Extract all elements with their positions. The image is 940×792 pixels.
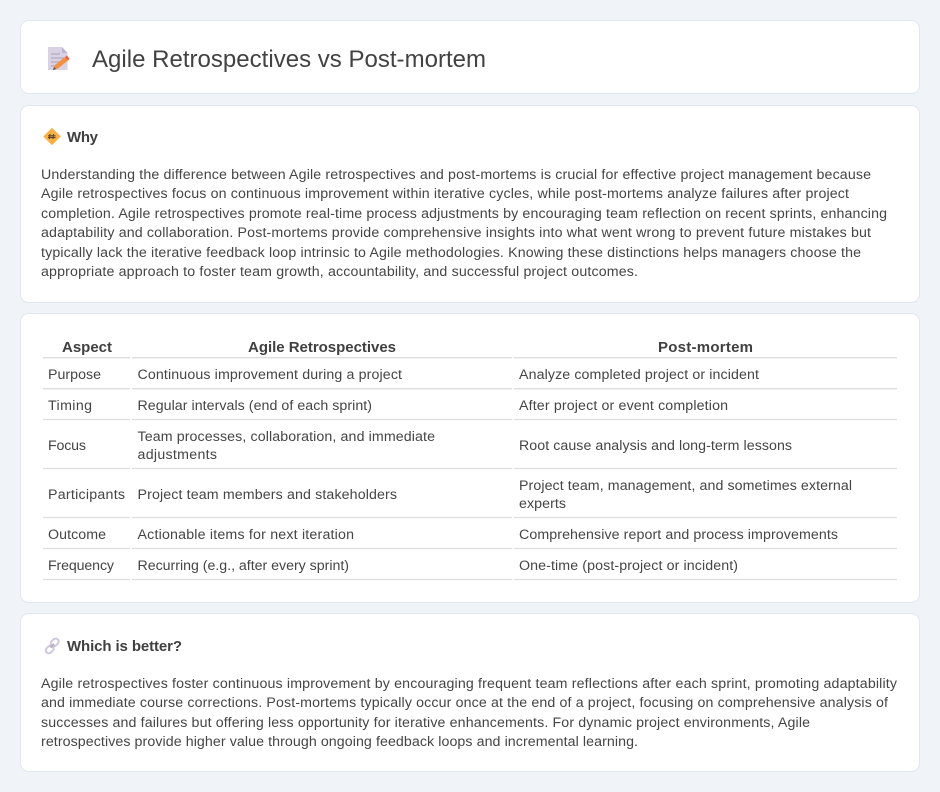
table row: purpose: Continuous improvement during a project [138,367,402,383]
table row: outcome [48,527,838,543]
table row: purpose: Purpose [48,367,101,383]
table row: participants: Project team members and stakeholders [138,487,397,503]
heading: which is better: Which is better? [67,638,182,655]
panel: comparison table [20,314,920,602]
icon: warning diamond [44,128,60,144]
table row: outcome: Comprehensive report and process improvements [519,527,838,543]
table header row: Post-mortem [658,339,753,356]
table row: participants: Project team, management, and sometimes external [519,478,852,494]
table row: focus: Root cause analysis and long-term lessons [519,438,792,454]
table row: outcome: Actionable items for next iteration [138,527,354,543]
table header row: Agile Retrospectives [248,339,396,356]
text block: why paragraph [41,167,887,280]
icon: link [45,637,60,655]
text block: why paragraph: Agile retrospectives focus on continuous improvement within iterative cycles, while post-mortems analyze failures after project [41,186,849,202]
table row: focus [48,429,792,463]
table row: frequency: One-time (post-project or incident) [519,558,738,574]
icon: document with pencil [48,47,70,70]
text block: which is better paragraph: and immediate course corrections. Post-mortems typically occur once at the end of a project, focusing on comprehensive analysis of [41,695,888,711]
table row: focus: Team processes, collaboration, and immediate [138,429,435,445]
table row: participants: experts [519,496,566,512]
panel: why [20,106,920,302]
table row: participants: Participants [48,487,125,503]
panel: title header [20,20,920,94]
table row: frequency [48,558,738,574]
text block: why paragraph: Understanding the difference between Agile retrospectives and post-mortems is crucial for effective project management because [41,167,871,183]
title: Agile Retrospectives vs Post-mortem [92,46,486,73]
table row: focus: Focus [48,438,86,454]
table row: timing: Timing [48,398,92,414]
table row: participants [48,478,852,512]
table row: timing: Regular intervals (end of each sprint) [138,398,372,414]
table row: frequency: Frequency [48,558,115,574]
text block: why paragraph: adaptability and collaboration. Post-mortems provide comprehensive insights into what went wrong to prevent future mistakes but [41,225,871,241]
table header row [62,339,753,356]
text block: which is better paragraph [41,676,898,750]
table row: purpose: Analyze completed project or incident [519,367,759,383]
table row: timing [48,398,728,414]
table row: focus: adjustments [138,447,217,463]
text block: which is better paragraph: retrospectives provide higher value through ongoing feedback loops and incremental learning. [41,734,638,750]
panel: which is better [20,614,920,772]
table row: purpose [48,367,759,383]
table header row: Aspect [62,339,112,356]
text block: which is better paragraph: successes and failures but offering less opportunity for iterative enhancements. For dynamic project environments, Agile [41,715,810,731]
table row: frequency: Recurring (e.g., after every sprint) [138,558,349,574]
text block: why paragraph: appropriate approach to foster team growth, accountability, and successful project outcomes. [41,264,638,280]
text block: which is better paragraph: Agile retrospectives foster continuous improvement by encouraging frequent team reflections after each sprint, promoting adaptability [41,676,898,692]
text block: why paragraph: completion. Agile retrospectives promote real-time process adjustments by encouraging team reflection on recent sprints, enhancing [41,206,887,222]
heading: why: Why [67,129,99,146]
table row: timing: After project or event completion [519,398,728,414]
table row: outcome: Outcome [48,527,106,543]
text block: why paragraph: typically lack the iterative feedback loop intrinsic to Agile methodologies. Knowing these distinctions helps managers choose the [41,245,861,261]
